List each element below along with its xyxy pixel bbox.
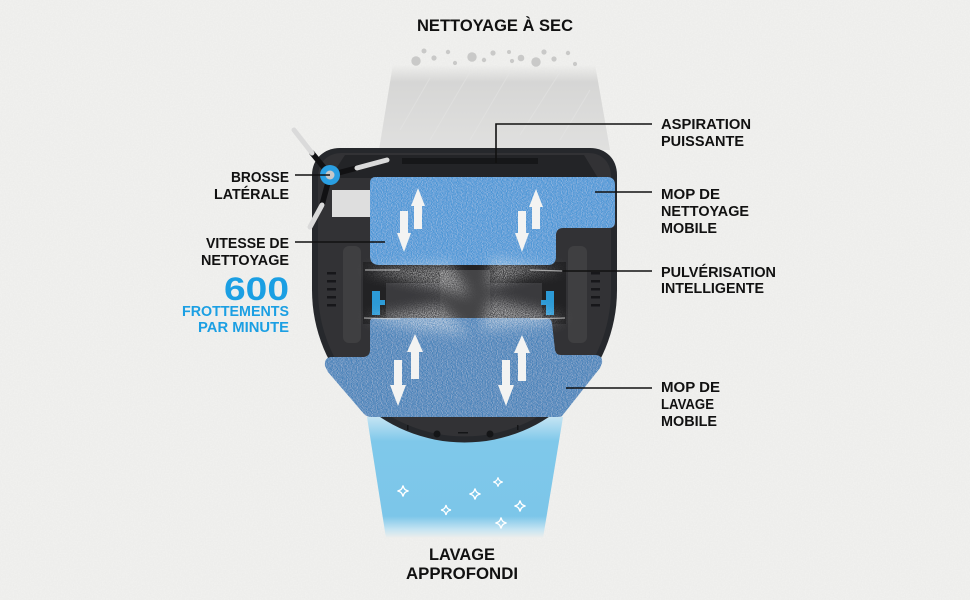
- cleaning mop (top, mobile): [370, 177, 615, 265]
- rear slot: [330, 155, 598, 178]
- wet cleaning band with sparkles: [367, 417, 563, 538]
- heading: deep wash: LAVAGE: [429, 546, 495, 564]
- label: smart spray: PULVÉRISATION: [661, 264, 776, 281]
- label: suction: PUISSANTE: [661, 134, 744, 150]
- label: cleaning mop: MOBILE: [661, 221, 717, 237]
- label: cleaning mop: MOP DE: [661, 187, 720, 203]
- label: smart spray: [661, 264, 776, 297]
- leader line: speed: [295, 241, 385, 243]
- inner chassis: [318, 153, 611, 436]
- heading: deep wash: APPROFONDI: [406, 565, 518, 583]
- leader line: cleaning mop: [595, 191, 652, 193]
- label: washing mop: MOP DE: [661, 380, 720, 396]
- label: cleaning mop: NETTOYAGE: [661, 204, 749, 220]
- label: side brush: BROSSE: [231, 170, 289, 186]
- spray mist: [363, 258, 566, 335]
- label: smart spray: INTELLIGENTE: [661, 281, 764, 297]
- leader line: spray: [563, 270, 652, 272]
- callout: 600 rubs per minute: FROTTEMENTS: [182, 304, 289, 320]
- label: washing mop: [661, 380, 720, 430]
- cavity details: [386, 270, 542, 318]
- label: suction: [661, 117, 751, 150]
- motion arrows: [390, 188, 543, 406]
- side brush: [294, 130, 387, 227]
- bottom sensors: [407, 425, 518, 438]
- product label: [332, 190, 370, 217]
- callout: 600 rubs per minute: 600: [224, 271, 289, 307]
- label: cleaning speed: [201, 236, 289, 269]
- leader line: washing mop: [566, 387, 652, 389]
- mist jets: [364, 270, 565, 319]
- label: side brush: [214, 170, 289, 203]
- label: side brush: LATÉRALE: [214, 186, 289, 203]
- callout: 600 rubs per minute: [182, 271, 289, 336]
- heading: dry cleaning: NETTOYAGE À SEC: [417, 16, 573, 35]
- blue clips: [372, 291, 554, 315]
- heading: deep wash: [406, 546, 518, 583]
- wheel treads: [327, 272, 600, 306]
- robot body: [312, 148, 617, 443]
- central cavity: [363, 262, 566, 324]
- dry cleaning band with dust: [379, 48, 610, 150]
- washing mop (bottom, mobile): [325, 318, 602, 417]
- label: cleaning mop: [661, 187, 749, 237]
- callout: 600 rubs per minute: PAR MINUTE: [198, 320, 289, 336]
- robot vacuum underside: [294, 130, 617, 443]
- left wheel: [343, 246, 361, 343]
- suction opening: [402, 158, 538, 164]
- label: washing mop: LAVAGE: [661, 397, 714, 413]
- label: cleaning speed: NETTOYAGE: [201, 253, 289, 269]
- label: washing mop: MOBILE: [661, 414, 717, 430]
- label: cleaning speed: VITESSE DE: [206, 236, 289, 252]
- leader line: aspiration: [496, 124, 652, 163]
- label: suction: ASPIRATION: [661, 117, 751, 133]
- right wheel: [568, 246, 587, 343]
- leader line: side brush: [295, 174, 330, 176]
